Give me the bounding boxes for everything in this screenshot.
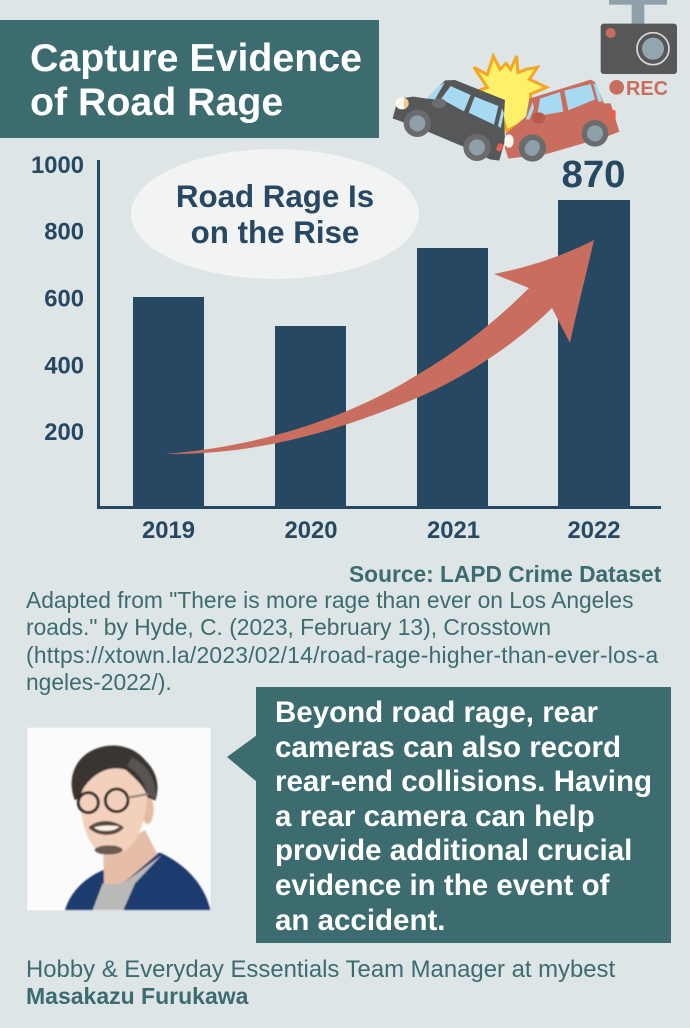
callout text: provide additional crucial <box>275 834 632 867</box>
speech ellipse: road rage is on the rise: Road Rage Is <box>176 179 374 214</box>
wheels <box>404 110 431 137</box>
title <box>30 36 362 124</box>
x axis labels: 2019 <box>142 517 195 544</box>
callout background <box>256 687 671 943</box>
black car <box>393 80 505 161</box>
speech ellipse: road rage is on the rise <box>131 149 419 279</box>
cardigan <box>65 853 210 910</box>
bar 2019 <box>133 297 204 507</box>
y axis labels: 200 <box>44 419 84 446</box>
ear <box>142 795 154 824</box>
callout text: a rear camera can help <box>275 800 595 833</box>
citation text: (https://xtown.la/2023/02/14/road-rage-higher-than-ever-los-a <box>26 642 658 668</box>
bar chart <box>31 152 661 544</box>
title: of Road Rage <box>30 80 283 124</box>
expert credit <box>26 956 615 1009</box>
icon: dash camera <box>601 0 677 100</box>
callout text: cameras can also record <box>275 731 621 764</box>
source line: Source: LAPD Crime Dataset <box>349 561 661 587</box>
title: Capture Evidence <box>30 36 362 80</box>
bar 2021 <box>417 248 488 507</box>
neck <box>103 830 157 884</box>
expert credit: Masakazu Furukawa <box>26 983 248 1009</box>
red car <box>505 80 619 162</box>
glasses <box>78 789 128 813</box>
y axis labels: 400 <box>44 352 84 380</box>
callout text: Beyond road rage, rear <box>275 696 598 729</box>
citation text <box>26 587 658 695</box>
crash burst <box>474 56 547 131</box>
x axis labels: 2021 <box>427 517 480 544</box>
x axis labels <box>142 517 620 544</box>
red car headlight <box>504 134 514 148</box>
bar 2020 <box>275 326 346 507</box>
callout pointer <box>227 735 257 782</box>
citation text: roads." by Hyde, C. (2023, February 13), Crosstown <box>26 614 551 640</box>
citation text: Adapted from "There is more rage than ever on Los Angeles <box>26 587 634 613</box>
wheels <box>519 134 546 162</box>
beard and mouth <box>88 821 124 835</box>
citation text: ngeles-2022/). <box>26 669 172 695</box>
icon: dash camera: REC <box>626 77 668 100</box>
x axis labels: 2020 <box>285 517 337 544</box>
face <box>79 766 147 855</box>
icon: collision cars <box>393 56 619 162</box>
bar 2022 <box>558 200 630 507</box>
y axis labels: 600 <box>44 286 84 312</box>
y axis labels: 800 <box>44 218 84 246</box>
title banner background <box>0 20 379 138</box>
rising trend arrow <box>165 240 594 454</box>
expert credit: Hobby & Everyday Essentials Team Manager at mybest <box>26 956 615 983</box>
expert portrait <box>27 728 211 910</box>
value label 870: 870 <box>561 153 626 196</box>
speech ellipse: road rage is on the rise: on the Rise <box>191 215 359 250</box>
t-shirt <box>93 855 162 910</box>
x axis labels: 2022 <box>568 517 620 544</box>
callout text: rear-end collisions. Having <box>275 765 652 798</box>
callout text: evidence in the event of <box>275 869 609 902</box>
y axis labels: 1000 <box>31 152 84 179</box>
hair <box>72 746 157 801</box>
callout text <box>275 696 652 937</box>
axes <box>98 160 661 508</box>
callout text: an accident. <box>275 904 446 937</box>
y axis labels <box>31 152 84 446</box>
